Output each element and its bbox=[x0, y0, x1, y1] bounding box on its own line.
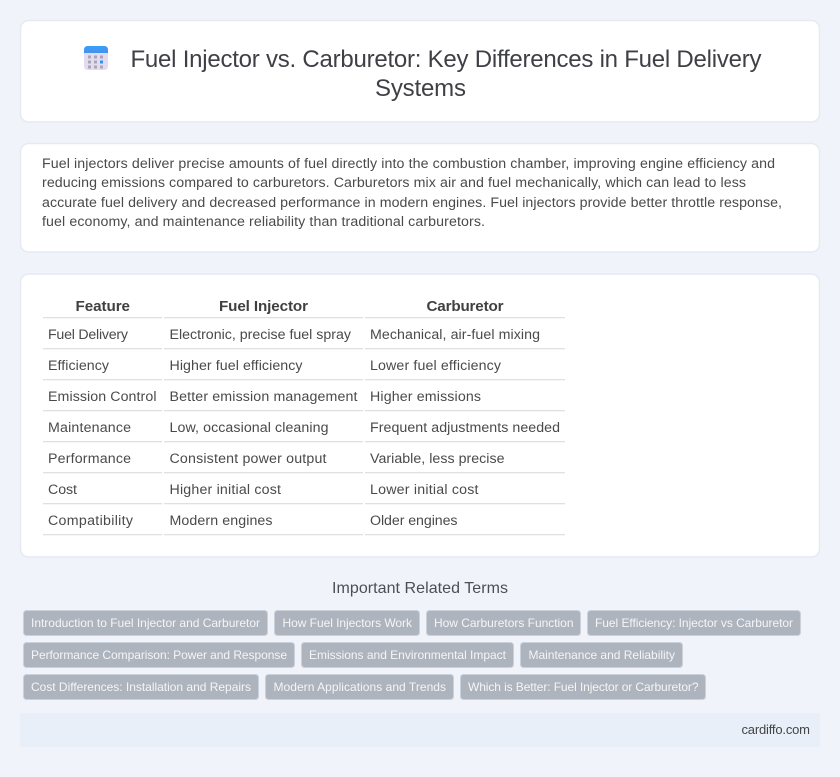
text block: summary paragraph: Fuel injectors deliver precise amounts of fuel directly into the combustion chamber, improving engine efficiency and bbox=[42, 156, 775, 172]
tag: performance comparison bbox=[24, 642, 294, 668]
tag: maintenance and reliability bbox=[520, 642, 682, 668]
footer bbox=[20, 713, 820, 747]
table row: efficiency: Efficiency bbox=[48, 358, 110, 374]
tag list: related terms bbox=[24, 610, 800, 700]
table row: efficiency: Lower fuel efficiency bbox=[370, 358, 502, 374]
text block: summary paragraph bbox=[42, 156, 782, 230]
tag: how fuel injectors work: How Fuel Injectors Work bbox=[282, 616, 413, 630]
title bbox=[130, 46, 762, 102]
table row: compatibility: Compatibility bbox=[48, 513, 134, 529]
text block: summary paragraph: accurate fuel delivery and decreased performance in modern engines. Fuel injectors provide better throttle response, bbox=[42, 195, 782, 211]
table row: compatibility: Older engines bbox=[370, 513, 458, 529]
table row: emission control: Better emission management bbox=[170, 389, 358, 405]
tag: emissions bbox=[302, 642, 514, 668]
tag: modern applications: Modern Applications and Trends bbox=[274, 680, 446, 694]
panel: summary bbox=[20, 144, 820, 252]
table header bbox=[43, 298, 565, 318]
table row: performance: Variable, less precise bbox=[370, 451, 505, 467]
panel: comparison table bbox=[20, 274, 820, 557]
tag: which is better: Which is Better: Fuel Injector or Carburetor? bbox=[468, 680, 699, 694]
table row: maintenance: Low, occasional cleaning bbox=[170, 420, 328, 436]
tag: how carburetors function bbox=[426, 610, 580, 636]
tag: how carburetors function: How Carburetors Function bbox=[434, 616, 574, 630]
tag: fuel efficiency: Fuel Efficiency: Injector vs Carburetor bbox=[595, 616, 793, 630]
title: Systems bbox=[375, 75, 466, 102]
table row: emission control: Emission Control bbox=[48, 389, 156, 405]
tag: introduction bbox=[24, 610, 268, 636]
table row: efficiency: Higher fuel efficiency bbox=[170, 358, 303, 374]
table row: maintenance: Maintenance bbox=[48, 420, 131, 436]
table row: cost: Lower initial cost bbox=[370, 482, 479, 498]
table row: compatibility: Modern engines bbox=[170, 513, 272, 529]
table row: emission control bbox=[43, 389, 565, 411]
table header: Fuel Injector bbox=[219, 298, 308, 315]
table header: Carburetor bbox=[426, 298, 504, 315]
icon: calendar bbox=[84, 46, 108, 70]
table row: compatibility bbox=[43, 513, 565, 535]
tag: emissions: Emissions and Environmental Impact bbox=[309, 648, 507, 662]
tag: how fuel injectors work bbox=[274, 610, 420, 636]
tag: cost differences: Cost Differences: Installation and Repairs bbox=[31, 680, 251, 694]
table row: performance: Performance bbox=[48, 451, 131, 467]
table row: maintenance: Frequent adjustments needed bbox=[370, 420, 560, 436]
tag: cost differences bbox=[24, 674, 258, 700]
table row: fuel delivery bbox=[43, 327, 565, 349]
tag: modern applications bbox=[266, 674, 454, 700]
panel: header bbox=[20, 20, 820, 122]
title: Fuel Injector vs. Carburetor: Key Differences in Fuel Delivery bbox=[130, 46, 762, 73]
table header: Feature bbox=[76, 298, 130, 315]
text block: summary paragraph: fuel economy, and maintenance reliability than traditional carburetors. bbox=[42, 214, 485, 230]
text block: summary paragraph: reducing emissions compared to carburetors. Carburetors mix air and fuel mechanically, which can lead to less bbox=[42, 175, 746, 191]
tag: which is better bbox=[460, 674, 706, 700]
tag: fuel efficiency bbox=[588, 610, 800, 636]
footer: source text: cardiffo.com bbox=[742, 722, 810, 737]
table row: fuel delivery: Mechanical, air-fuel mixing bbox=[370, 327, 540, 343]
table row: cost bbox=[43, 482, 565, 504]
tag: introduction: Introduction to Fuel Injector and Carburetor bbox=[31, 616, 260, 630]
table row: efficiency bbox=[43, 358, 565, 380]
table row: cost: Higher initial cost bbox=[170, 482, 281, 498]
tag: maintenance and reliability: Maintenance and Reliability bbox=[528, 648, 675, 662]
table row: emission control: Higher emissions bbox=[370, 389, 481, 405]
table row: cost: Cost bbox=[48, 482, 77, 498]
table row: performance: Consistent power output bbox=[170, 451, 327, 467]
tag: performance comparison: Performance Comparison: Power and Response bbox=[31, 648, 287, 662]
table row: fuel delivery: Electronic, precise fuel spray bbox=[170, 327, 352, 343]
table row: maintenance bbox=[43, 420, 565, 442]
table row: fuel delivery: Fuel Delivery bbox=[48, 327, 129, 343]
heading: important related terms: Important Related Terms bbox=[332, 580, 508, 597]
table row: performance bbox=[43, 451, 565, 473]
